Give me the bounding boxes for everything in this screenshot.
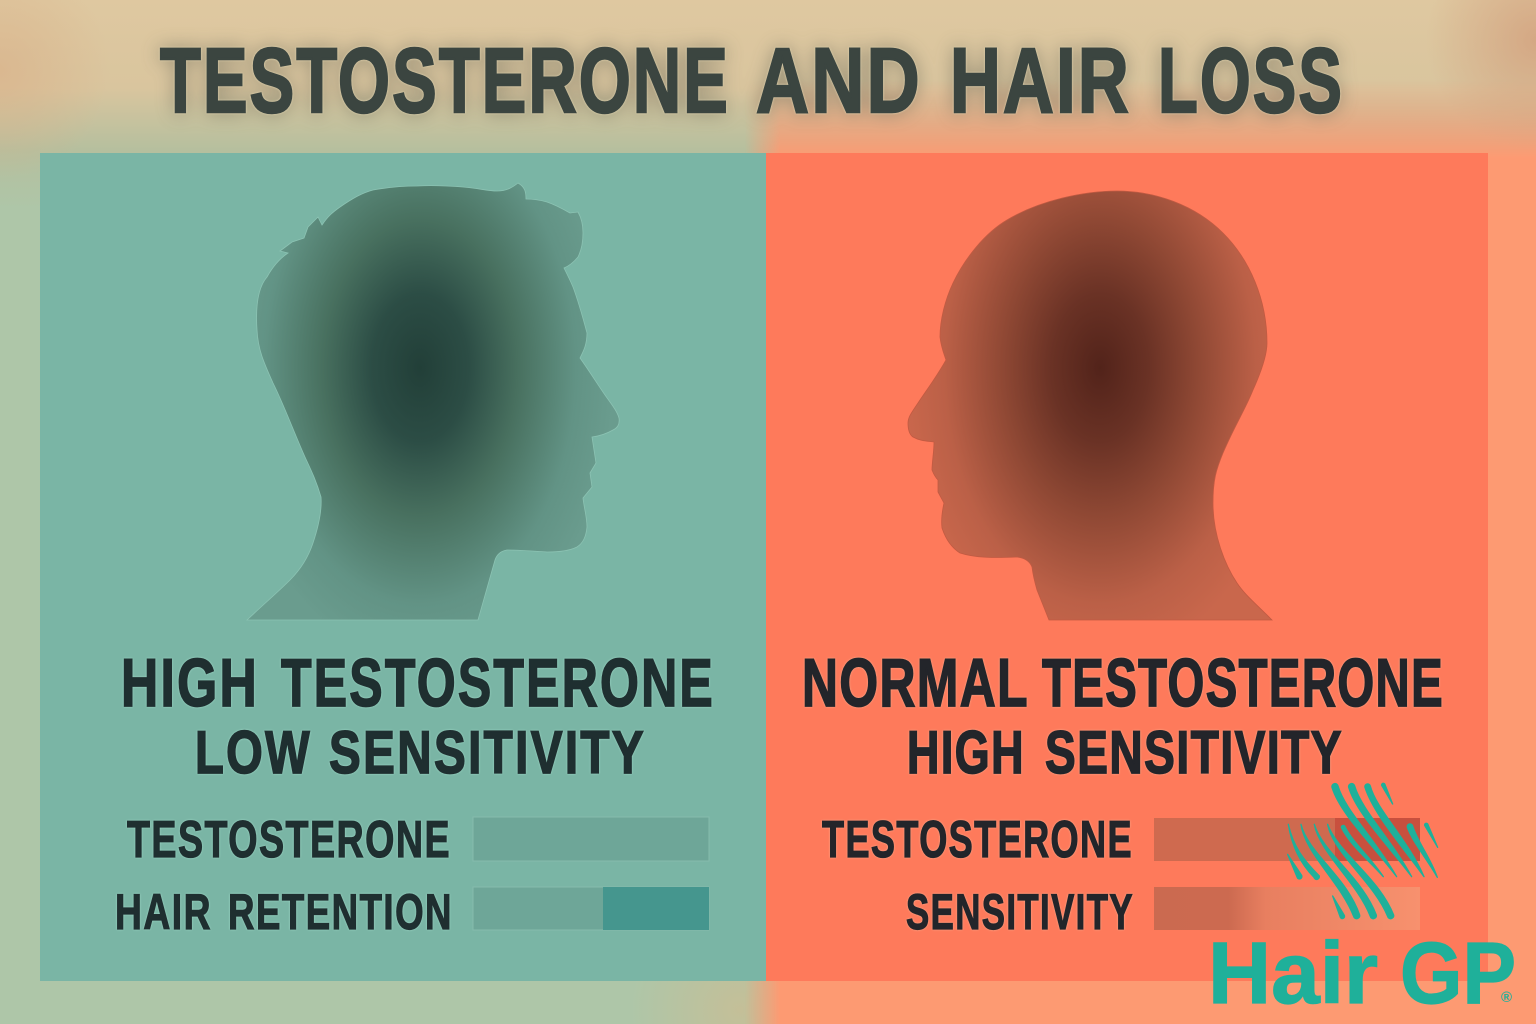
title: HAIR: [950, 30, 1131, 132]
label: hair retention: HAIR: [115, 884, 212, 940]
bar: testosterone: [1154, 818, 1420, 861]
logo wordmark: GP: [1400, 925, 1516, 1022]
bar: testosterone: [473, 817, 709, 861]
registered mark: ®: [1501, 989, 1512, 1006]
heading: high testosterone low sensitivity: HIGH: [121, 645, 259, 721]
logo: Hair GP: [1208, 783, 1516, 1022]
heading: high testosterone low sensitivity: LOW: [195, 719, 312, 786]
heading: high testosterone low sensitivity: TESTOSTERONE: [281, 645, 715, 721]
label: testosterone: TESTOSTERONE: [822, 811, 1133, 869]
icon: head silhouette with hair: [247, 183, 619, 620]
panel: high testosterone: [40, 153, 766, 981]
panel: normal testosterone: [766, 153, 1488, 981]
heading: high testosterone low sensitivity: SENSITIVITY: [329, 719, 646, 786]
label: testosterone: TESTOSTERONE: [127, 811, 451, 869]
bar: hair retention: [473, 887, 709, 930]
label: hair retention: RETENTION: [228, 884, 453, 940]
logo wordmark: Hair: [1208, 925, 1378, 1022]
label: hair retention: [115, 884, 453, 940]
label: sensitivity: SENSITIVITY: [906, 884, 1134, 940]
panel background: coral: [766, 153, 1488, 981]
heading: normal testosterone high sensitivity: HIGH: [907, 719, 1025, 786]
heading: normal testosterone high sensitivity: SENSITIVITY: [1045, 719, 1343, 786]
icon: hair strands: [1288, 783, 1438, 919]
bar: sensitivity: [1154, 887, 1420, 930]
panel background: teal: [40, 153, 766, 981]
heading: normal testosterone high sensitivity: NORMAL: [802, 645, 1029, 721]
heading: normal testosterone high sensitivity: [802, 645, 1444, 786]
title: [160, 30, 1344, 132]
title: AND: [756, 30, 922, 132]
title: LOSS: [1158, 30, 1344, 132]
logo wordmark: [1208, 925, 1516, 1022]
heading: high testosterone low sensitivity: [121, 645, 715, 786]
icon: bald head silhouette: [908, 191, 1272, 620]
title: TESTOSTERONE: [160, 30, 730, 132]
